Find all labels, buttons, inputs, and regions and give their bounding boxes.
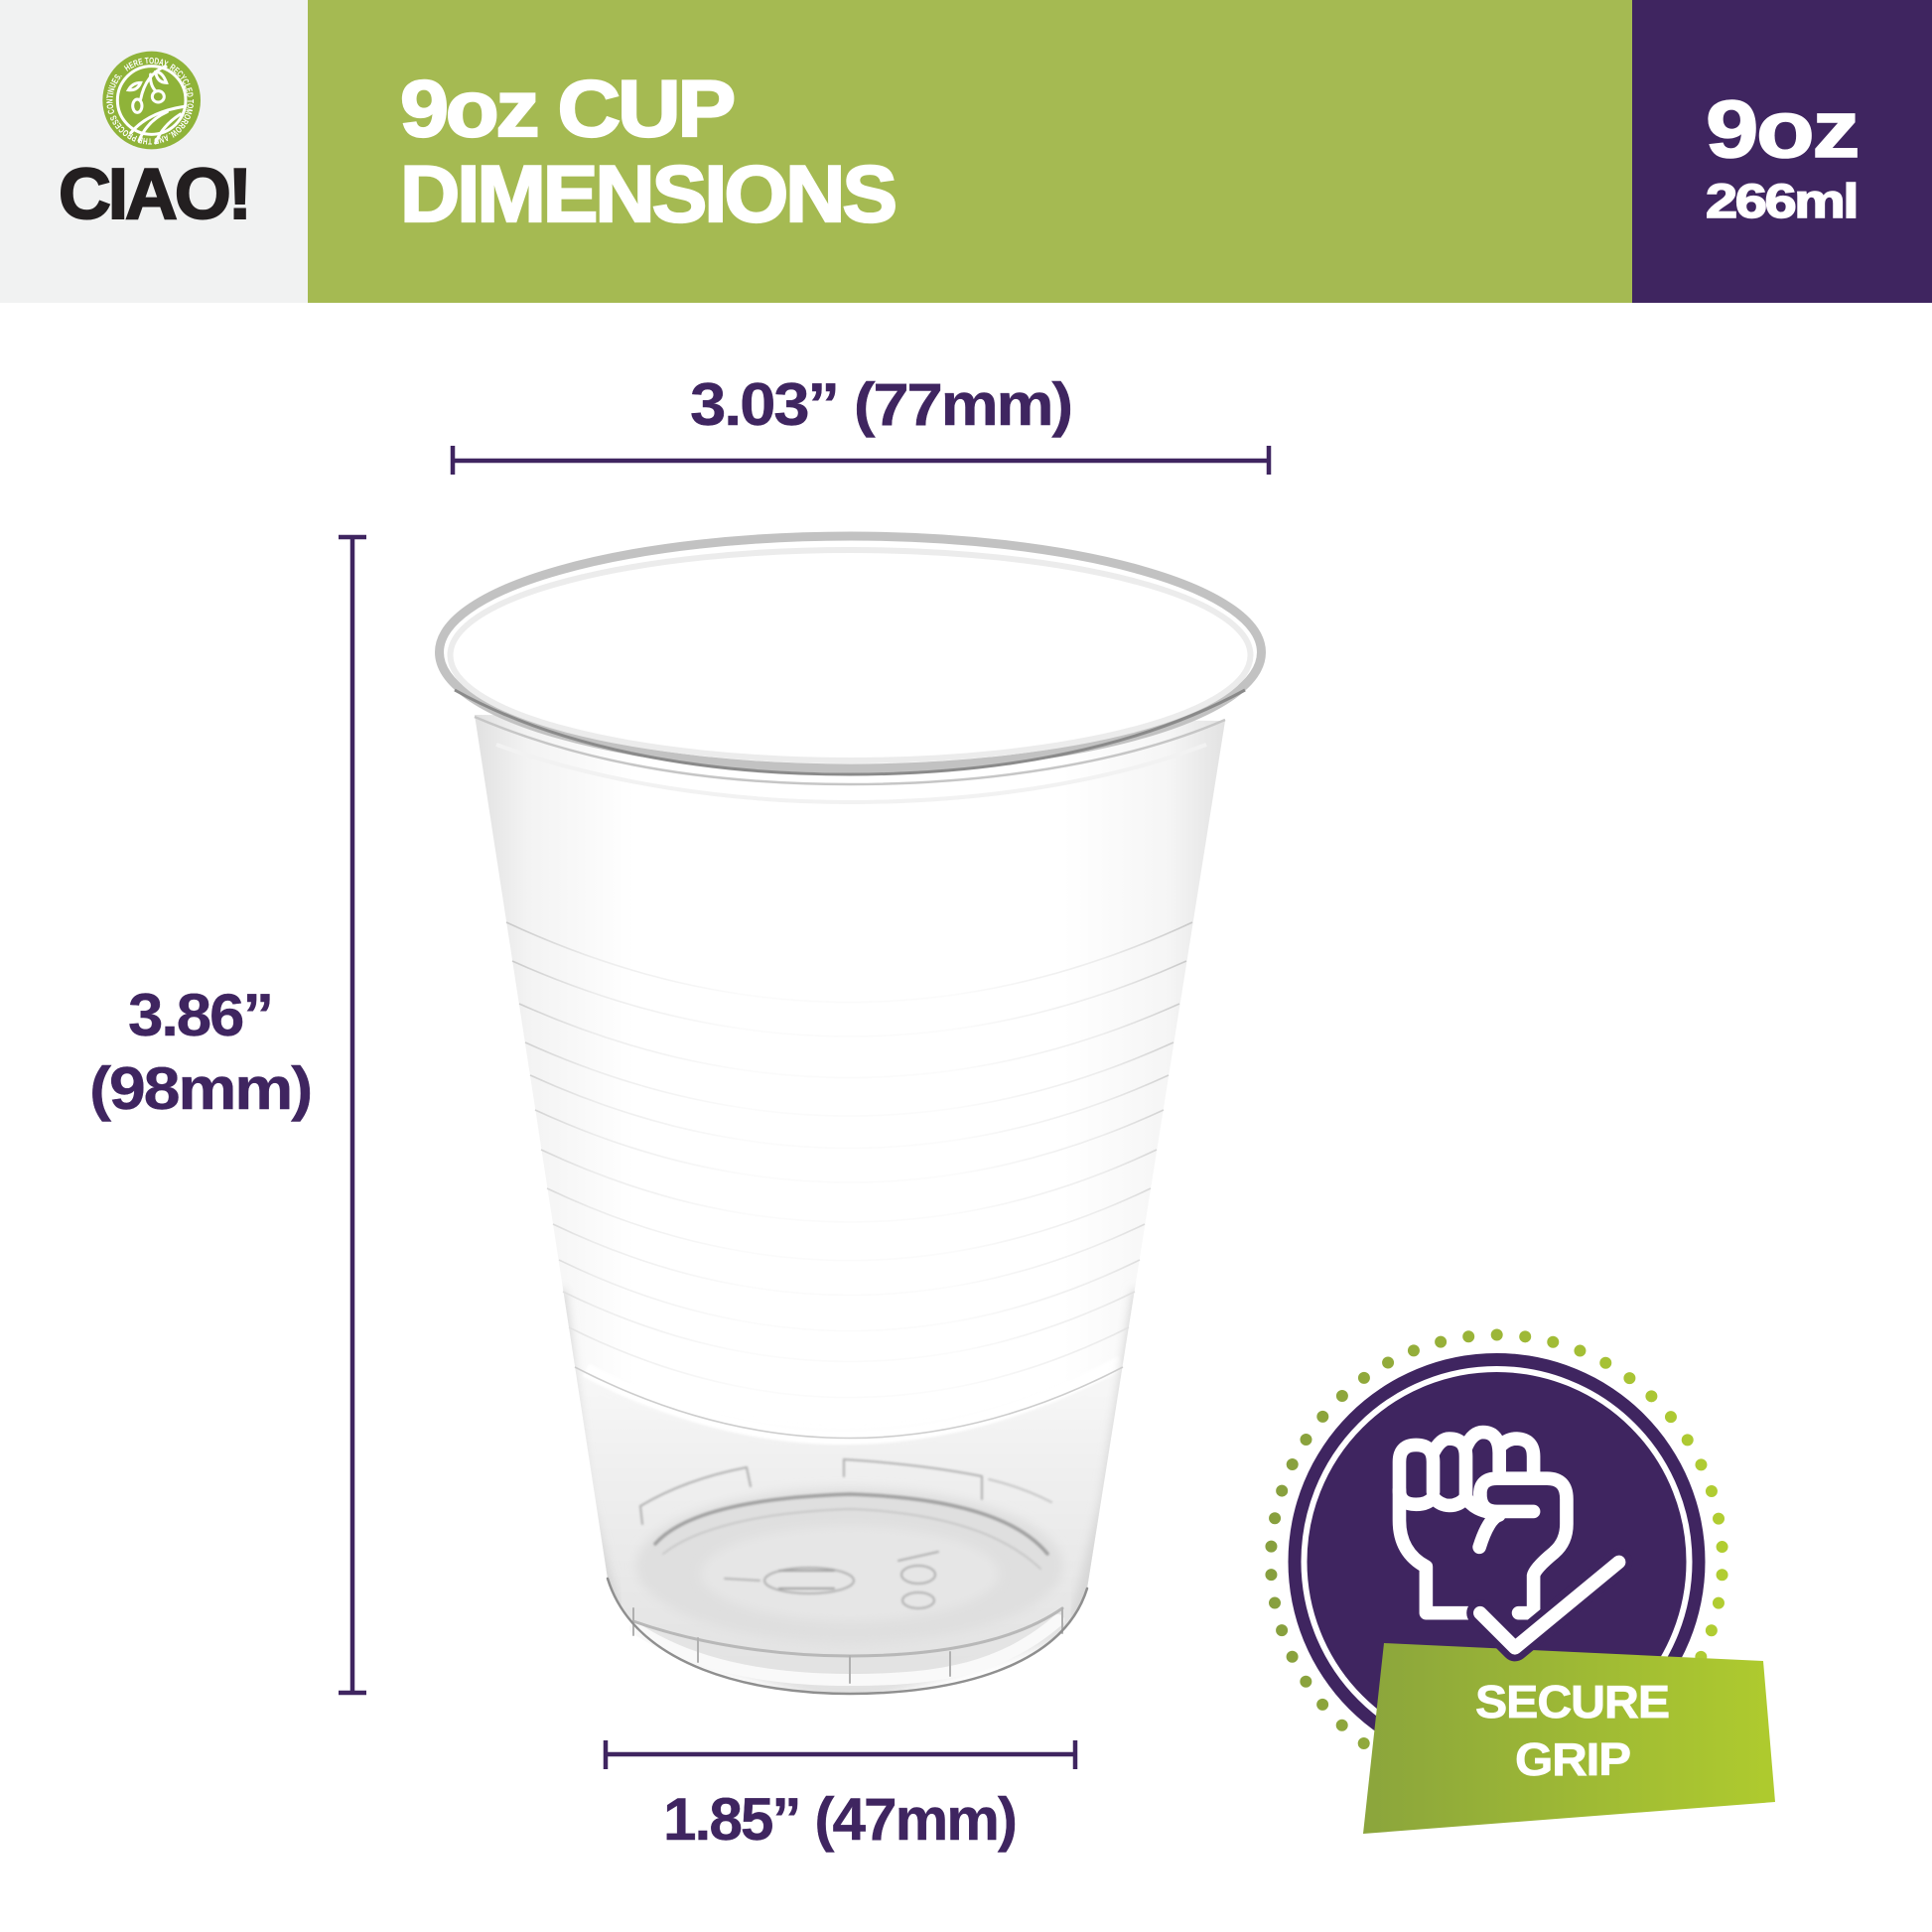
- label: height: 3.86”: [128, 982, 272, 1048]
- clear plastic cup: [439, 536, 1261, 1708]
- capacity text: [1706, 84, 1858, 228]
- icon: recycling olive seal: HERE TODAY, RECYCLED TOMORROW. AND THE PROCESS CONTINUES.: [106, 58, 195, 145]
- cup rim: [439, 536, 1261, 802]
- badge: secure grip: [1271, 1334, 1775, 1834]
- logo wordmark: CIAO!: [59, 155, 249, 234]
- cup lower section: [556, 1291, 1142, 1708]
- label: height: (98mm): [89, 1055, 311, 1122]
- logo panel: [0, 0, 308, 303]
- banner label: GRIP: [1515, 1733, 1630, 1785]
- title: DIMENSIONS: [400, 150, 895, 239]
- banner label: [1475, 1676, 1669, 1785]
- dotted ring: [1271, 1334, 1723, 1787]
- arrow: top width measure: [453, 446, 1269, 475]
- banner: [1363, 1643, 1775, 1834]
- panel: title band: [308, 0, 1632, 303]
- header band: [0, 0, 1932, 303]
- arrow: height measure: [339, 537, 366, 1693]
- dimension: base width: [606, 1740, 1075, 1853]
- arrow: base width measure: [606, 1740, 1075, 1769]
- dimension: height: [89, 537, 366, 1693]
- banner label: SECURE: [1475, 1676, 1669, 1727]
- cup ribs: [506, 922, 1192, 1438]
- cup foot: [608, 1579, 1087, 1694]
- capacity text: 9oz: [1706, 84, 1858, 175]
- cup body: [475, 715, 1225, 1694]
- label: height: [89, 982, 311, 1122]
- dimension: top width: [453, 371, 1269, 475]
- badge circle: [1289, 1353, 1706, 1770]
- icon: fist with checkmark: [1399, 1433, 1619, 1648]
- capacity text: 266ml: [1706, 176, 1857, 228]
- label: base width: 1.85” (47mm): [663, 1786, 1016, 1853]
- title: 9oz CUP: [400, 65, 734, 154]
- title: [400, 65, 895, 239]
- cup base embossing: [640, 1459, 1051, 1608]
- label: top width: 3.03” (77mm): [690, 371, 1071, 438]
- panel: capacity: [1632, 0, 1932, 303]
